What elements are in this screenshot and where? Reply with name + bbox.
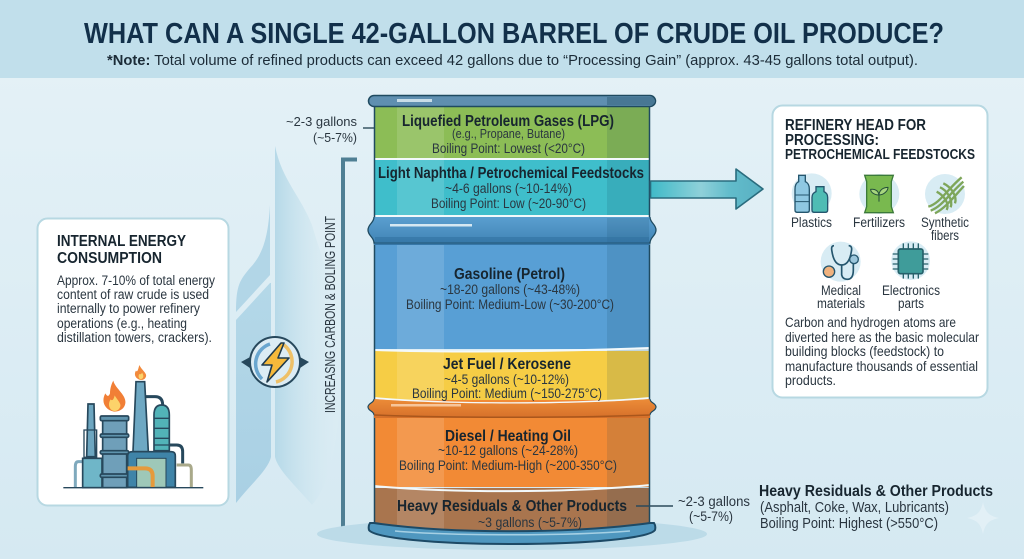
heavy residuals callout line and amounts: ~2-3 gallons	[678, 494, 750, 509]
panel body text	[57, 273, 215, 345]
icon: electronics parts	[891, 241, 930, 280]
panel heading: PROCESSING:	[785, 132, 879, 149]
icon: fertilizers	[859, 174, 899, 214]
arrow to feedstocks panel	[650, 169, 763, 209]
label: jet fuel: ~4-5 gallons (~10-12%)	[444, 372, 569, 387]
icon: energy cycle lightning	[241, 337, 309, 387]
label: heavy residuals	[397, 498, 627, 530]
label: synthetic fibers: Synthetic	[921, 215, 969, 230]
heavy residuals callout line and amounts: (~5-7%)	[689, 509, 733, 524]
panel body text: Approx. 7-10% of total energy	[57, 273, 215, 288]
icon: synthetic fibers	[925, 174, 965, 214]
label: gasoline: Boiling Point: Medium-Low (~30-200°C)	[406, 297, 614, 312]
panel: refinery head for processing	[772, 106, 988, 398]
panel heading: CONSUMPTION	[57, 250, 162, 267]
panel body text: distillation towers, crackers).	[57, 330, 212, 345]
panel body text: products.	[785, 372, 836, 388]
barrel shadow	[317, 518, 707, 550]
decorative flow shapes	[236, 146, 342, 505]
label: jet fuel: Boiling Point: Medium (~150-275°C)	[412, 386, 602, 401]
panel body text: content of raw crude is used	[57, 287, 209, 302]
label: LPG: Liquefied Petroleum Gases (LPG)	[402, 113, 614, 130]
label: plastics: Plastics	[791, 215, 832, 230]
fraction: jet fuel	[374, 351, 650, 401]
label: medical materials	[817, 283, 865, 311]
label: diesel: ~10-12 gallons (~24-28%)	[438, 443, 578, 458]
label: LPG: (e.g., Propane, Butane)	[452, 126, 565, 141]
fraction: diesel	[374, 400, 650, 487]
LPG callout left: (~5-7%)	[313, 130, 357, 145]
label: diesel: Diesel / Heating Oil	[445, 428, 571, 445]
label: medical materials: materials	[817, 296, 865, 311]
heavy residuals description: Boiling Point: Highest (>550°C)	[760, 516, 938, 532]
fraction: gasoline	[374, 217, 650, 349]
label: gasoline	[406, 266, 614, 312]
heavy residuals callout line and amounts	[636, 494, 750, 524]
label: naphtha: Boiling Point: Low (~20-90°C)	[431, 196, 586, 211]
header band	[0, 0, 1024, 78]
panel body text: diverted here as the basic molecular	[785, 329, 979, 345]
band dividers	[374, 159, 650, 491]
panel heading	[785, 117, 975, 163]
sparkle mark	[967, 502, 999, 534]
icon: medical materials	[821, 242, 861, 282]
fraction: heavy residuals	[374, 488, 650, 532]
bracket: increasing carbon and boiling point	[323, 160, 357, 531]
label: synthetic fibers: fibers	[931, 228, 959, 243]
LPG callout left: ~2-3 gallons	[286, 114, 357, 129]
label: gasoline: Gasoline (Petrol)	[454, 266, 565, 283]
mid rim orange	[368, 399, 656, 418]
label: LPG: Boiling Point: Lowest (<20°C)	[432, 141, 585, 156]
label: medical materials: Medical	[821, 283, 861, 298]
fraction: naphtha	[374, 160, 650, 215]
icon: refinery	[63, 365, 203, 488]
panel body text: building blocks (feedstock) to	[785, 343, 944, 359]
panel body text: operations (e.g., heating	[57, 316, 187, 331]
panel heading: REFINERY HEAD FOR	[785, 117, 926, 134]
panel heading: INTERNAL ENERGY	[57, 233, 186, 250]
panel body text: manufacture thousands of essential	[785, 358, 978, 374]
mid rim blue	[368, 217, 656, 245]
panel body text: Carbon and hydrogen atoms are	[785, 314, 956, 330]
fraction: LPG	[374, 107, 650, 158]
label: electronics parts	[882, 283, 940, 311]
barrel shading	[397, 107, 650, 532]
bottom rim	[369, 523, 655, 544]
label: fertilizers: Fertilizers	[853, 215, 905, 230]
label: jet fuel: Jet Fuel / Kerosene	[443, 356, 571, 373]
barrel side outlines	[374, 107, 650, 525]
LPG callout left	[286, 114, 374, 145]
label: jet fuel	[412, 356, 602, 401]
label: naphtha	[378, 165, 644, 211]
label: synthetic fibers	[921, 215, 969, 243]
barrel	[317, 96, 707, 550]
label: naphtha: ~4-6 gallons (~10-14%)	[445, 181, 572, 196]
panel heading	[57, 233, 186, 267]
heavy residuals description: (Asphalt, Coke, Wax, Lubricants)	[760, 500, 949, 516]
label: gasoline: ~18-20 gallons (~43-48%)	[440, 282, 580, 297]
label: electronics parts: Electronics	[882, 283, 940, 298]
label: heavy residuals: ~3 gallons (~5-7%)	[478, 515, 582, 530]
label: diesel: Boiling Point: Medium-High (~200-350°C)	[399, 458, 617, 473]
heavy residuals description	[759, 483, 993, 532]
panel heading: PETROCHEMICAL FEEDSTOCKS	[785, 147, 975, 163]
panel: internal energy consumption	[38, 218, 228, 506]
bracket: increasing carbon and boiling point: INCREASNG CARBON & BOLING POINT	[323, 216, 339, 413]
heavy residuals description: Heavy Residuals & Other Products	[759, 483, 993, 500]
panel body text: internally to power refinery	[57, 301, 200, 316]
note: *Note: Total volume of refined products can exceed 42 gallons due to “Processing Gain” (approx. 43-45 gallons total output).	[107, 53, 918, 69]
label: naphtha: Light Naphtha / Petrochemical Feedstocks	[378, 165, 644, 182]
label: heavy residuals: Heavy Residuals & Other Products	[397, 498, 627, 515]
label: electronics parts: parts	[898, 296, 924, 311]
icon: plastics	[792, 173, 832, 213]
top rim	[368, 96, 656, 106]
label: LPG	[402, 113, 614, 156]
label: diesel	[399, 428, 617, 473]
panel body text	[785, 314, 979, 388]
